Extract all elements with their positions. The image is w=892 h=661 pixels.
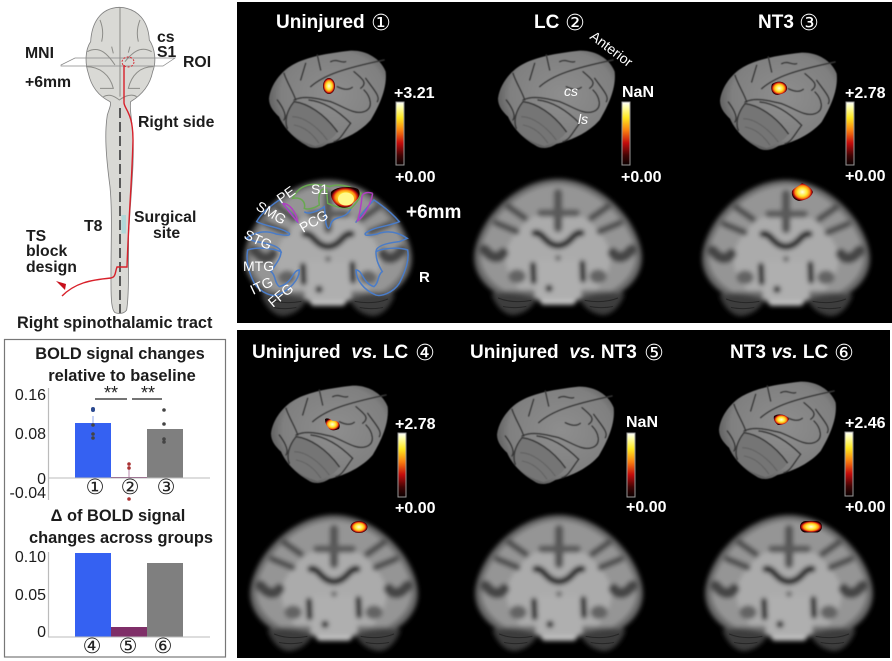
activation	[774, 414, 789, 425]
caption right spinothalamic tract: Right spinothalamic tract	[17, 314, 213, 332]
min value: +0.00	[621, 169, 662, 186]
region label PCG: PCG	[296, 207, 331, 236]
stars two: **	[141, 383, 155, 403]
slice activation	[800, 521, 822, 532]
chart frame	[4, 340, 226, 657]
region label STG: STG	[242, 226, 275, 253]
delta tick 0.10: 0.10	[15, 549, 46, 566]
delta bar 4	[75, 553, 111, 637]
label ls italic: ls	[578, 111, 588, 127]
bar uninjured	[75, 423, 111, 478]
label +6mm: +6mm	[25, 74, 71, 91]
y axis tick 0: 0	[37, 471, 46, 488]
slice 4	[250, 515, 418, 651]
data points	[91, 407, 166, 501]
min value: +0.00	[395, 500, 436, 517]
ROI circle	[122, 57, 134, 67]
value NaN: NaN	[622, 84, 654, 101]
left diagram: spinal cord schematic	[17, 7, 215, 332]
min value: +0.00	[845, 168, 886, 185]
activation	[323, 78, 335, 94]
label site: site	[153, 225, 180, 242]
uninjured slice with regions	[244, 180, 412, 316]
NT3 slice	[702, 180, 870, 316]
colour bar	[627, 433, 635, 497]
delta bar chart	[48, 552, 210, 637]
colour bar 2.78	[846, 102, 854, 165]
title LC: LC	[534, 12, 560, 33]
side label R: R	[419, 269, 430, 286]
label S1: S1	[157, 44, 177, 61]
labels: MNI	[25, 45, 54, 62]
label block: block	[26, 243, 67, 260]
heading line two: relative to baseline	[48, 367, 196, 385]
title NT3: NT3	[758, 12, 794, 33]
region label ITG: ITG	[248, 273, 275, 298]
uninjured vs NT3 surface	[497, 387, 614, 484]
group key 3: ③	[157, 475, 175, 499]
max value: +2.46	[845, 415, 886, 432]
label anterior: Anterior	[587, 28, 636, 70]
y axis tick -0.04: -0.04	[10, 485, 46, 502]
black background	[237, 2, 892, 323]
slice activation	[792, 183, 813, 201]
group key 5: ⑤	[119, 634, 137, 658]
uninjured vs LC surface	[271, 386, 388, 483]
label cs: cs	[157, 29, 175, 46]
max value: +2.78	[395, 416, 436, 433]
circled number 1: ①	[371, 11, 391, 36]
max value: +2.78	[845, 85, 886, 102]
colour bar NaN	[622, 102, 630, 165]
label design: design	[26, 259, 77, 276]
delta bar 5	[111, 627, 147, 637]
activation	[325, 418, 340, 430]
heading line one: BOLD signal changes	[35, 345, 205, 363]
NT3 vs LC surface	[719, 382, 836, 479]
uninjured surface	[269, 51, 386, 148]
LC slice	[474, 179, 642, 315]
activation core	[338, 192, 354, 206]
midline dashes	[119, 108, 121, 313]
slice level label: +6mm	[406, 202, 461, 223]
second heading line one: Δ of BOLD signal	[51, 507, 185, 525]
circled number 3: ③	[799, 11, 819, 36]
delta tick 0: 0	[37, 624, 46, 641]
panel: bar charts	[4, 340, 226, 658]
significance bar one	[95, 398, 127, 400]
circled number 4: ④	[415, 341, 435, 366]
stars one: **	[104, 383, 118, 403]
bar NT3	[147, 429, 183, 478]
value NaN: NaN	[626, 414, 658, 431]
MNI plane	[61, 58, 175, 66]
label surgical: Surgical	[134, 209, 196, 226]
title uninjured vs LC: Uninjured vs. LC	[252, 342, 409, 363]
colour bar	[398, 433, 406, 497]
slice activation	[331, 187, 360, 208]
panel: group maps	[237, 2, 892, 658]
significance bar two	[132, 398, 162, 400]
region label FFG: FFG	[265, 280, 296, 310]
circled number 2: ②	[565, 11, 585, 36]
red arrow	[56, 281, 66, 290]
max value: +3.21	[394, 85, 435, 102]
bar LC	[111, 477, 147, 478]
slice activation	[350, 521, 368, 533]
label cs italic: cs	[564, 83, 578, 99]
activation	[771, 82, 787, 95]
min value: +0.00	[395, 169, 436, 186]
group key 4: ④	[83, 634, 101, 658]
label TS: TS	[26, 228, 46, 245]
label ROI: ROI	[183, 54, 211, 71]
group key 1: ①	[86, 475, 104, 499]
title uninjured vs NT3: Uninjured vs. NT3	[470, 342, 637, 363]
bar chart baseline	[48, 388, 210, 501]
LC surface	[498, 51, 615, 148]
min value: +0.00	[845, 499, 886, 516]
y axis tick 0.08: 0.08	[15, 426, 46, 443]
group key 6: ⑥	[154, 634, 172, 658]
region label SMG: SMG	[254, 198, 289, 228]
region outlines	[246, 184, 408, 295]
surgical site	[122, 215, 126, 234]
circled number 6: ⑥	[834, 341, 854, 366]
slice 6	[705, 515, 873, 651]
schematic drawing of brain and cord	[86, 7, 155, 313]
NT3 surface	[720, 53, 837, 150]
second heading line two: changes across groups	[29, 529, 213, 547]
label right side: Right side	[138, 114, 215, 131]
region label MTG: MTG	[243, 258, 274, 274]
delta tick 0.05: 0.05	[15, 587, 46, 604]
title uninjured: Uninjured	[276, 12, 365, 33]
colour bar	[845, 432, 853, 496]
group key 2: ②	[121, 475, 139, 499]
circled number 5: ⑤	[644, 341, 664, 366]
delta bar 6	[147, 563, 183, 637]
right spinothalamic tract	[62, 65, 133, 296]
y axis tick 0.16: 0.16	[15, 387, 46, 404]
region label S1: S1	[311, 181, 328, 197]
min value: +0.00	[626, 499, 667, 516]
title NT3 vs LC: NT3 vs. LC	[730, 342, 828, 363]
lower background	[237, 330, 890, 658]
label T8: T8	[84, 218, 103, 235]
region label PE: PE	[274, 183, 298, 206]
slice 5	[475, 515, 643, 651]
colour bar 3.21	[396, 102, 404, 165]
